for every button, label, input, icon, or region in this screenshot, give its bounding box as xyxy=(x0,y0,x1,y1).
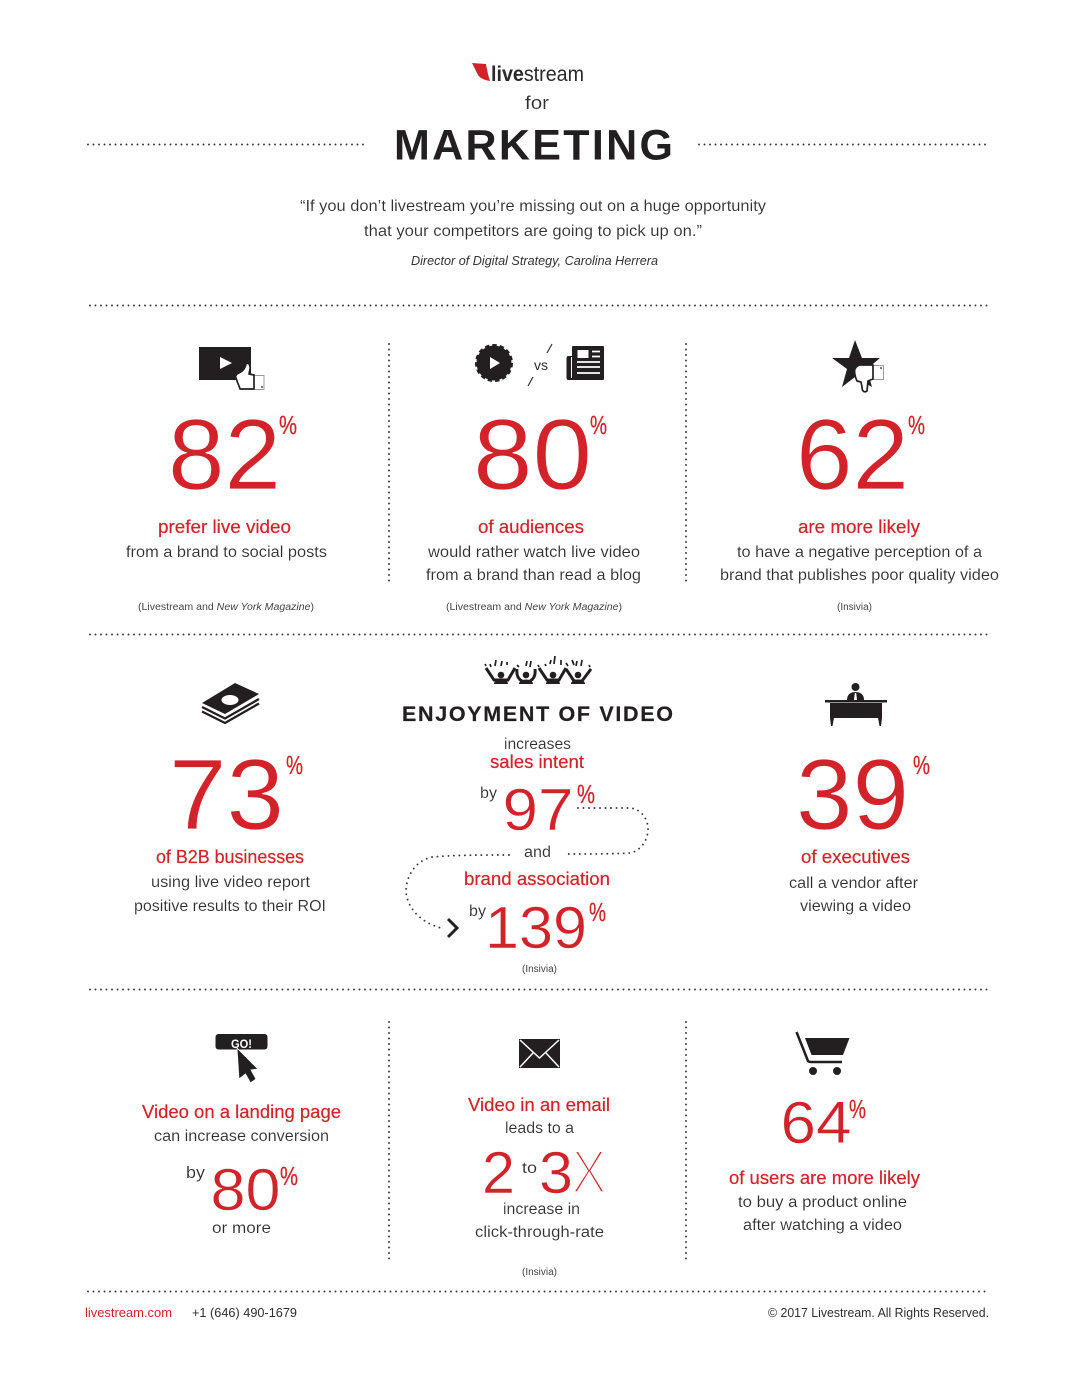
panel: 62% are more likely xyxy=(720,340,999,613)
quote: that your competitors are going to pick up on.” xyxy=(364,223,702,240)
icon: star with thumbs down xyxy=(832,340,884,392)
icon: go button with cursor: GO! xyxy=(231,1039,252,1051)
quote: “If you don’t livestream you’re missing out on a huge opportunity xyxy=(300,198,766,215)
stat: by 80%: 80 xyxy=(210,1157,280,1223)
stat: by 139%: 139 xyxy=(485,895,587,961)
heading: video on a landing page: Video on a landing page xyxy=(142,1102,341,1122)
heading: enjoyment of video: ENJOYMENT OF VIDEO xyxy=(402,702,673,726)
text: increases: increases xyxy=(504,736,571,753)
text block: to buy a product online xyxy=(738,1194,907,1211)
text block: viewing a video xyxy=(800,898,911,915)
stat: by 139%: by xyxy=(469,903,486,920)
heading: prefer live video: prefer live video xyxy=(158,517,291,537)
text: for: for xyxy=(525,93,549,113)
stat: 2 to 3X: 3 xyxy=(539,1140,573,1206)
stat: by 97%: by xyxy=(480,785,497,802)
text block: to have a negative perception of a xyxy=(737,544,982,561)
text block: from a brand to social posts xyxy=(126,544,327,561)
panel: 80% of audiences xyxy=(426,344,641,613)
icon: go button with cursor xyxy=(216,1034,268,1083)
text block: from a brand than read a blog xyxy=(426,567,641,584)
icon: video badge vs newspaper: vs xyxy=(534,357,548,373)
icon: video with thumbs up xyxy=(199,347,264,390)
stat: 62%: % xyxy=(908,410,925,440)
panel: 82% prefer live video xyxy=(126,347,327,613)
heading: brand association: brand association xyxy=(464,869,610,889)
stat: 2 to 3X xyxy=(482,1138,607,1207)
stat: by 80%: % xyxy=(280,1161,298,1191)
icon: video badge vs newspaper xyxy=(476,344,604,386)
footer: phone: +1 (646) 490-1679 xyxy=(192,1305,297,1320)
text block xyxy=(134,874,326,915)
text block: would rather watch live video xyxy=(427,544,640,561)
heading: video in an email: Video in an email xyxy=(468,1095,610,1115)
source: (Insivia) xyxy=(837,602,872,613)
text: and: and xyxy=(524,844,551,861)
stat: 73%: 73 xyxy=(169,739,284,851)
text block xyxy=(738,1194,907,1234)
arrow: dotted connector xyxy=(406,808,648,937)
quote xyxy=(300,198,766,240)
panel: video on a landing page xyxy=(142,1034,341,1237)
stat: by 97%: % xyxy=(577,779,595,809)
stat: 73%: % xyxy=(286,750,303,780)
text: leads to a: leads to a xyxy=(505,1120,574,1137)
stat: 64%: % xyxy=(849,1094,866,1124)
heading: sales intent: sales intent xyxy=(490,752,584,772)
heading: are more likely: are more likely xyxy=(798,517,920,537)
text block: increase in xyxy=(503,1201,580,1218)
source: (Insivia) xyxy=(522,964,557,975)
footer xyxy=(85,1305,989,1320)
text block: using live video report xyxy=(151,874,311,891)
source: (Livestream and New York Magazine ) xyxy=(446,602,622,613)
text block: after watching a video xyxy=(743,1217,902,1234)
text block: brand that publishes poor quality video xyxy=(720,567,999,584)
stat: 82%: % xyxy=(279,410,297,440)
panel: 73% of B2B businesses xyxy=(134,683,326,915)
icon: executive at desk xyxy=(825,683,887,726)
stat: 82%: 82 xyxy=(168,399,281,511)
stat: 2 to 3X: X xyxy=(571,1138,607,1207)
text: or more: or more xyxy=(212,1220,271,1237)
panel: 39% of executives xyxy=(789,683,930,915)
stat: 39%: % xyxy=(913,750,930,780)
title: MARKETING xyxy=(394,122,673,170)
source: (Livestream and New York Magazine ) xyxy=(138,602,314,613)
icon: envelope xyxy=(519,1039,560,1068)
stat: 64%: 64 xyxy=(780,1090,852,1156)
text block: click-through-rate xyxy=(475,1224,604,1241)
text block xyxy=(789,875,919,915)
stat: by 80% xyxy=(186,1157,298,1223)
panel: 64% of users xyxy=(729,1032,920,1234)
header xyxy=(300,63,766,268)
stat: by 97%: 97 xyxy=(502,777,574,843)
text block: positive results to their ROI xyxy=(134,898,326,915)
heading: of audiences: of audiences xyxy=(478,517,584,537)
stat: 80%: % xyxy=(590,410,607,440)
icon: cheering crowd xyxy=(485,656,591,684)
stat: 80%: 80 xyxy=(473,399,592,511)
panel: enjoyment of video xyxy=(402,656,673,975)
icon: stack of money xyxy=(202,683,259,723)
icon: shopping cart xyxy=(796,1032,850,1075)
stat: by 97% xyxy=(480,777,595,843)
stat: by 139%: % xyxy=(589,897,606,927)
footer: copyright: © 2017 Livestream. All Rights Reserved. xyxy=(768,1305,989,1320)
source: (Insivia) xyxy=(522,1267,557,1278)
heading: of users are more likely: of users are more likely xyxy=(729,1168,920,1188)
stat: 2 to 3X: to xyxy=(522,1160,537,1177)
text block: can increase conversion xyxy=(154,1128,329,1145)
heading: of B2B businesses: of B2B businesses xyxy=(156,847,304,867)
heading: of executives: of executives xyxy=(801,847,910,867)
text block xyxy=(426,544,641,584)
panel: video in an email xyxy=(468,1039,610,1278)
logo: livestream: livestream xyxy=(491,63,584,86)
stat: 62%: 62 xyxy=(796,399,909,511)
footer: website: livestream.com xyxy=(85,1305,172,1320)
stat: 2 to 3X: 2 xyxy=(482,1140,515,1206)
stat: 39%: 39 xyxy=(796,739,909,851)
text block: call a vendor after xyxy=(789,875,919,892)
text block xyxy=(720,544,999,584)
text block xyxy=(475,1201,604,1241)
stat: by 80%: by xyxy=(186,1163,206,1182)
quote attribution: Director of Digital Strategy, Carolina Herrera xyxy=(411,254,658,268)
